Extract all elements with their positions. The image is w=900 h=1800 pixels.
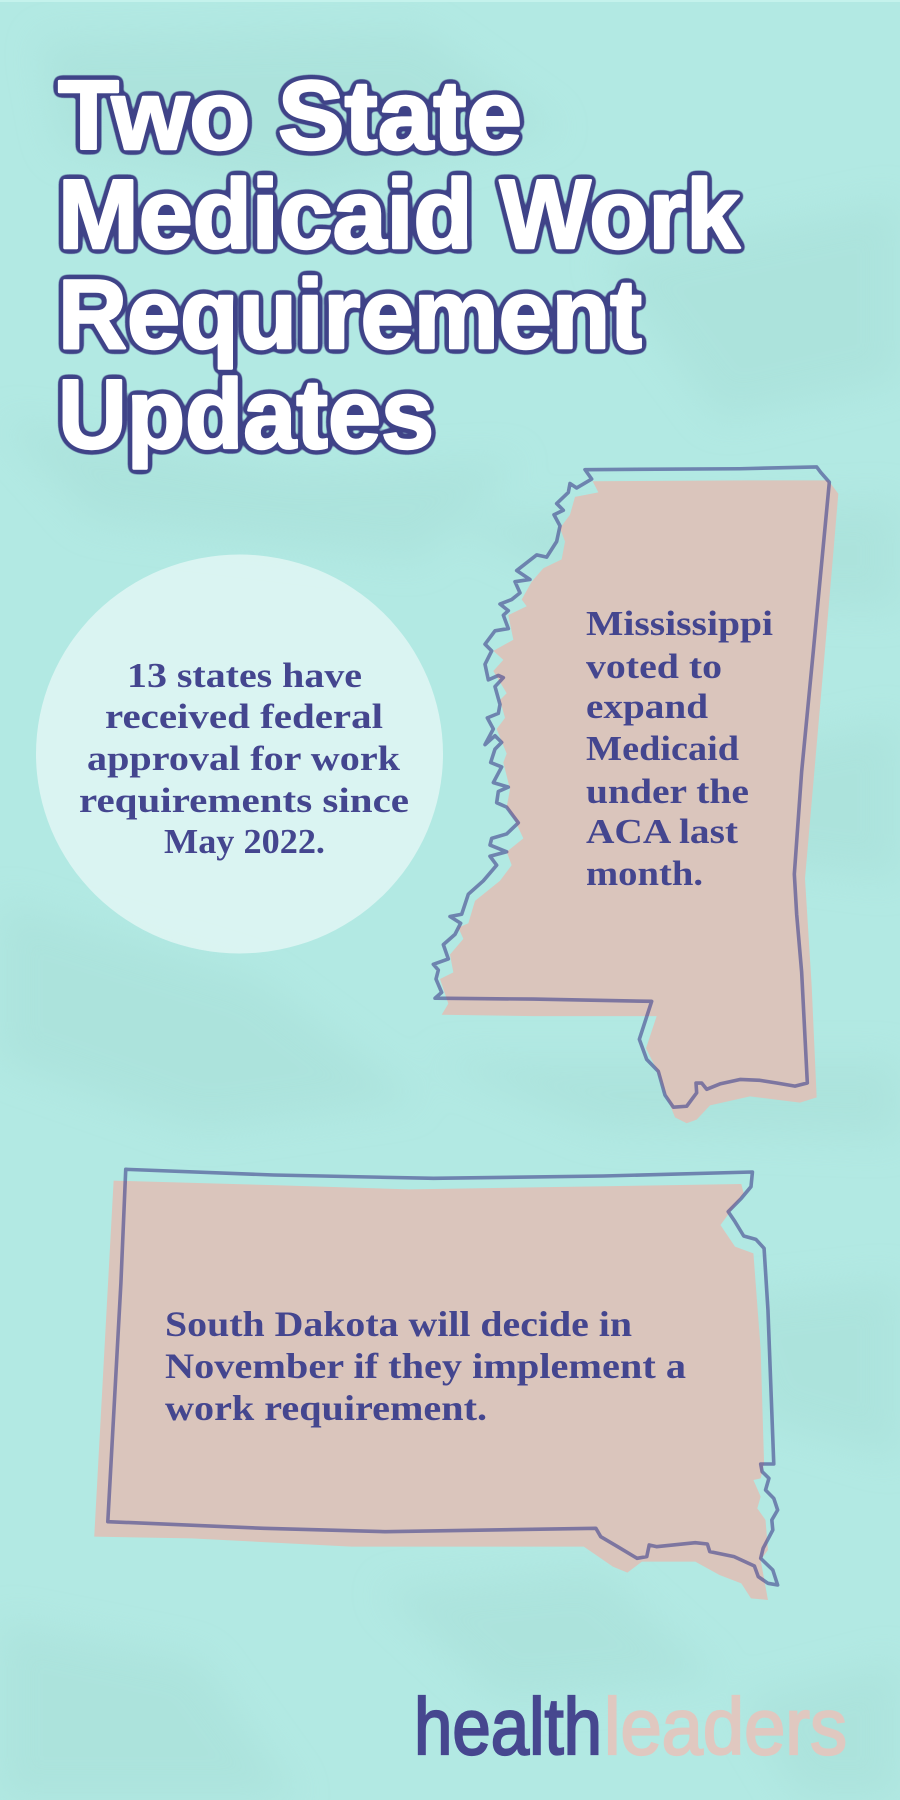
Mississippi text: expand (586, 687, 709, 726)
Mississippi text: Medicaid (586, 729, 740, 768)
South Dakota text: South Dakota will decide in (165, 1304, 632, 1344)
South Dakota fill shape (94, 1181, 768, 1600)
title: Medicaid Work (58, 159, 740, 269)
South Dakota text: work requirement. (165, 1388, 487, 1428)
Mississippi text: voted to (586, 647, 722, 686)
callout text: approval for work (87, 739, 401, 778)
Mississippi outline (433, 467, 829, 1107)
Mississippi text: Mississippi (586, 604, 773, 643)
title: Requirement (58, 259, 642, 369)
callout text: 13 states have (127, 656, 362, 695)
panel: 13 states callout (36, 554, 443, 954)
callout text: May 2022. (164, 822, 325, 861)
panel: Mississippi (433, 467, 838, 1123)
title: Updates (58, 359, 434, 469)
Mississippi text (586, 604, 773, 893)
Mississippi text: under the (586, 772, 749, 811)
title (58, 60, 740, 469)
logo: healthleaders: leaders (604, 1682, 847, 1771)
title: Two State (58, 60, 522, 170)
logo: healthleaders (414, 1682, 847, 1771)
logo: healthleaders: health (414, 1682, 602, 1771)
Mississippi text: ACA last (586, 812, 738, 851)
callout text: requirements since (79, 781, 409, 820)
callout circle (36, 554, 443, 954)
callout text: received federal (105, 697, 383, 736)
South Dakota text (165, 1304, 686, 1428)
Mississippi text: month. (586, 854, 703, 893)
callout text (79, 656, 409, 861)
Mississippi fill shape (440, 480, 838, 1123)
South Dakota outline (108, 1169, 778, 1585)
South Dakota text: November if they implement a (165, 1346, 686, 1386)
panel: South Dakota (94, 1169, 778, 1600)
